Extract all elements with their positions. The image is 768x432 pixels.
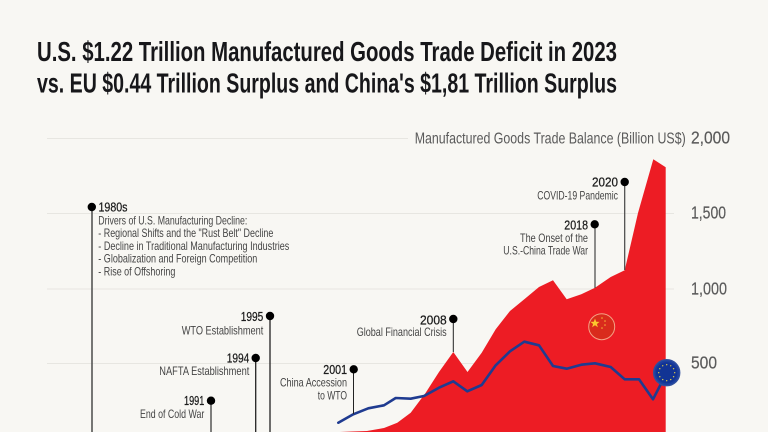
- annotation: 1995: [182, 310, 274, 432]
- annotation: 1980s: - Regional Shifts and the "Rust Belt" Decline: [98, 226, 274, 240]
- y axis labels: [691, 128, 730, 373]
- annotation: 1980s: - Rise of Offshoring: [98, 264, 175, 278]
- blue line: EU trade balance: [338, 342, 667, 423]
- y axis labels: 1,000: [691, 278, 727, 298]
- annotation: 1991: 1991: [184, 394, 204, 408]
- annotation: 1994: [159, 352, 260, 432]
- annotation: 2018: U.S.-China Trade War: [503, 244, 588, 258]
- title: [37, 36, 617, 98]
- annotation: 1980s: Drivers of U.S. Manufacturing Decline:: [98, 214, 247, 228]
- annotation: 1991: [140, 394, 215, 432]
- icon: EU flag: [654, 360, 680, 386]
- annotation: 2001: 2001: [323, 363, 347, 377]
- annotation: 1991: End of Cold War: [140, 407, 204, 421]
- annotation: 2001: [280, 363, 358, 414]
- annotation: 2018: 2018: [564, 218, 588, 232]
- axis title: Manufactured Goods Trade Balance (Billion US$): [415, 130, 686, 148]
- y axis labels: 1,500: [691, 202, 726, 222]
- annotation: 2018: The Onset of the: [520, 231, 588, 245]
- annotation: 2001: China Accession: [280, 375, 347, 389]
- annotation: 2008: Global Financial Crisis: [357, 325, 447, 339]
- annotation: 2020: COVID-19 Pandemic: [537, 188, 618, 202]
- annotation: 1980s: [88, 201, 289, 432]
- annotation: 1995: 1995: [241, 310, 263, 324]
- y axis labels: 500: [691, 353, 717, 373]
- annotation: 2018: [503, 218, 599, 288]
- annotation: 2008: [357, 313, 457, 352]
- annotation: 1994: NAFTA Establishment: [159, 364, 250, 378]
- annotation: 2001: to WTO: [318, 389, 347, 403]
- annotation: 1995: WTO Establishment: [182, 323, 264, 337]
- annotation: 2020: [537, 176, 629, 270]
- annotation: 1994: 1994: [227, 352, 249, 366]
- red area: China trade balance: [340, 159, 666, 432]
- icon: China flag: [589, 314, 615, 340]
- y axis labels: 2,000: [691, 128, 730, 148]
- annotation: 1980s: - Globalization and Foreign Competition: [98, 252, 257, 266]
- annotation: 1980s: - Decline in Traditional Manufacturing Industries: [98, 239, 289, 253]
- annotation: 2008: 2008: [420, 313, 447, 327]
- annotation: 1980s: 1980s: [98, 201, 128, 215]
- annotation: 2020: 2020: [592, 176, 618, 190]
